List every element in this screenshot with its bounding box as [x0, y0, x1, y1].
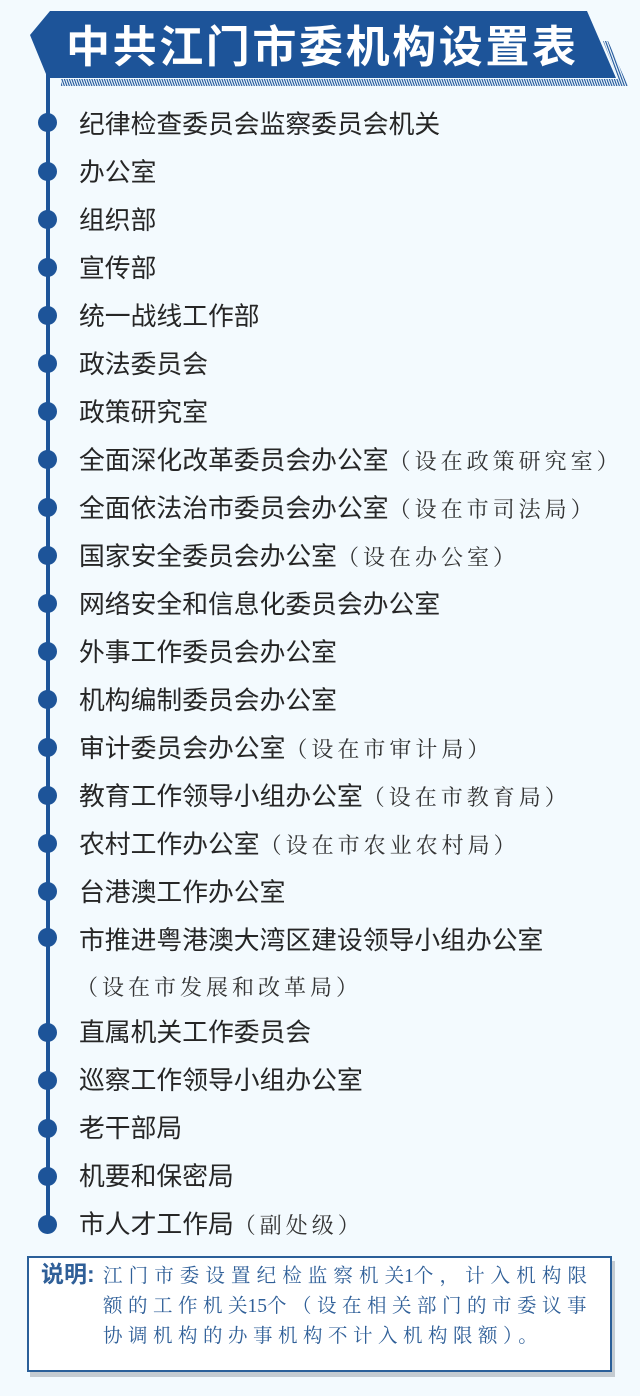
item 23: 市人才工作局（副处级） — [79, 1211, 364, 1239]
item 8: 全面深化改革委员会办公室（设在政策研究室） — [79, 447, 623, 475]
note box — [27, 1256, 612, 1372]
item 5: 统一战线工作部 — [79, 303, 260, 331]
item 21: 老干部局 — [79, 1115, 182, 1143]
note text: 额的工作机关15个（设在相关部门的市委议事 — [103, 1296, 592, 1317]
title banner — [30, 11, 628, 86]
item 19: 直属机关工作委员会 — [79, 1019, 311, 1047]
item 17: 台港澳工作办公室 — [79, 879, 285, 907]
item 3: 组织部 — [79, 207, 156, 235]
item 1: 纪律检查委员会监察委员会机关 — [79, 111, 440, 139]
item 4 — [38, 255, 156, 283]
item 18: （设在市发展和改革局） — [76, 975, 362, 1000]
item 6: 政法委员会 — [79, 351, 208, 379]
item 15: 教育工作领导小组办公室（设在市教育局） — [79, 783, 571, 811]
note text — [103, 1265, 593, 1347]
item 14: 审计委员会办公室（设在市审计局） — [79, 735, 493, 763]
title banner: 中共江门市委机构设置表 — [66, 23, 579, 72]
item 13: 机构编制委员会办公室 — [79, 687, 337, 715]
note label: 说明: — [41, 1261, 95, 1287]
item 11: 网络安全和信息化委员会办公室 — [79, 591, 440, 619]
item 3 — [38, 207, 156, 235]
note text: 江门市委设置纪检监察机关1个，计入机构限 — [103, 1266, 593, 1287]
item 4: 宣传部 — [79, 255, 156, 283]
note text: 协调机构的办事机构不计入机构限额）。 — [103, 1326, 543, 1347]
item 2 — [38, 159, 156, 187]
item 22: 机要和保密局 — [79, 1163, 234, 1191]
item 20: 巡察工作领导小组办公室 — [79, 1067, 363, 1095]
item 12: 外事工作委员会办公室 — [79, 639, 337, 667]
item 18: 市推进粤港澳大湾区建设领导小组办公室 — [79, 927, 543, 955]
item 2: 办公室 — [79, 159, 156, 187]
item 16: 农村工作办公室（设在市农业农村局） — [79, 831, 520, 859]
item 7: 政策研究室 — [79, 399, 208, 427]
item 9: 全面依法治市委员会办公室（设在市司法局） — [79, 495, 597, 523]
timeline axis — [46, 70, 50, 1220]
item 18 — [38, 927, 543, 1000]
item 10: 国家安全委员会办公室（设在办公室） — [79, 543, 519, 571]
